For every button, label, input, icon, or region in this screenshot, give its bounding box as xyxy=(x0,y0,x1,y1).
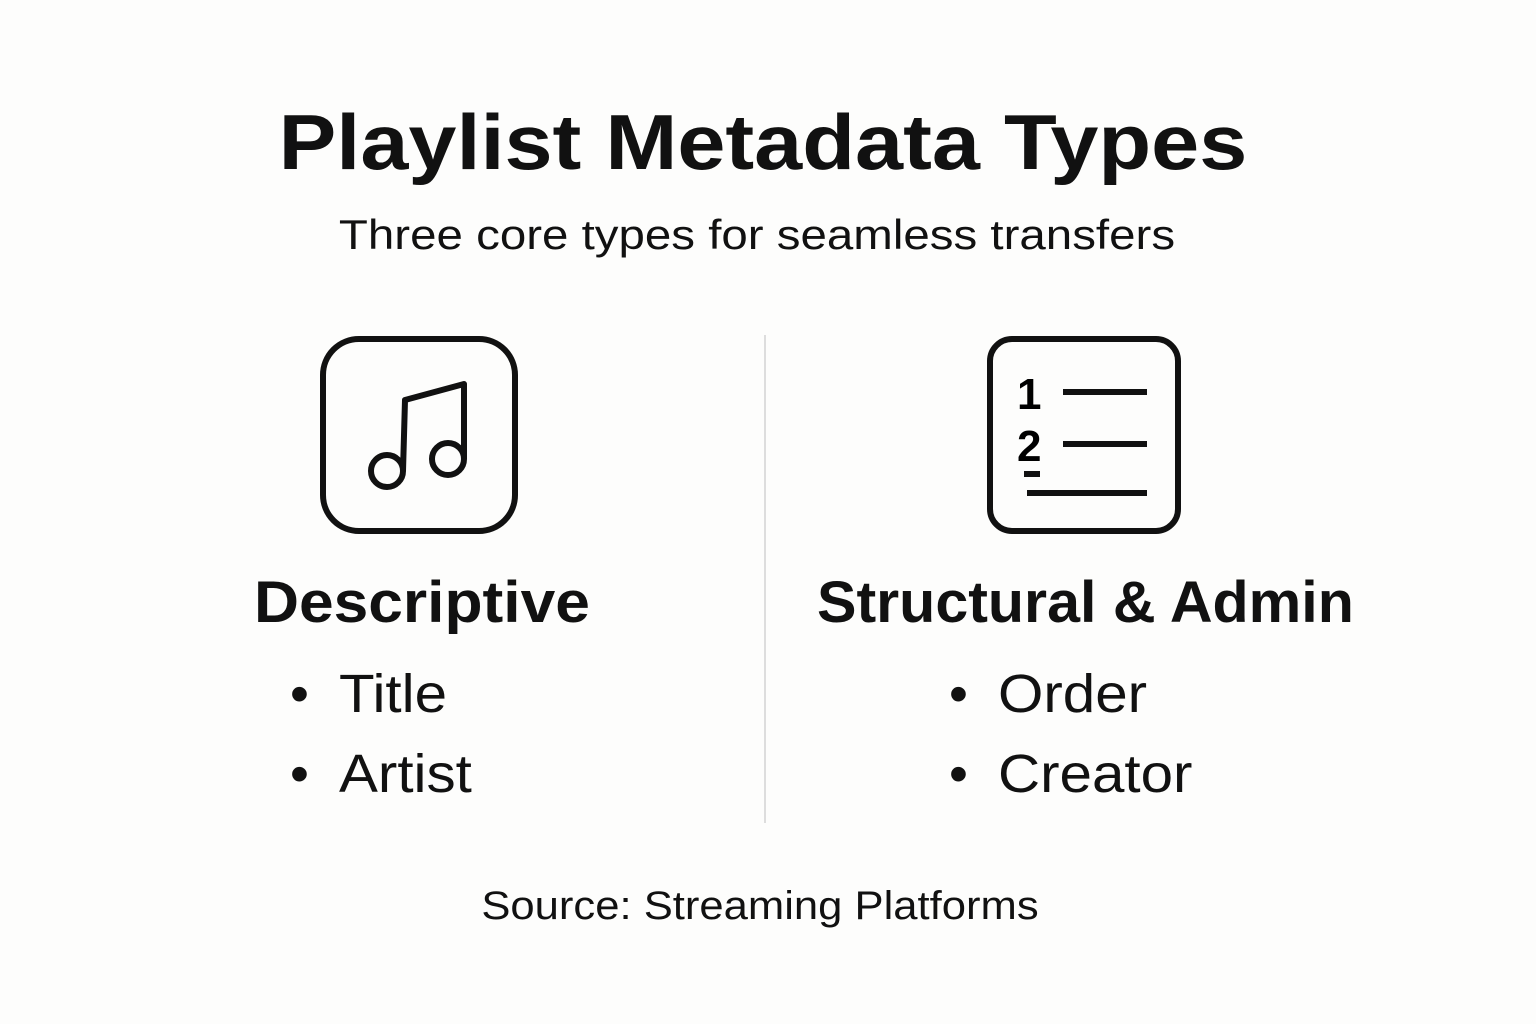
panel: descriptive xyxy=(254,336,590,804)
list xyxy=(949,664,1192,804)
list: Creator xyxy=(998,744,1192,804)
title: Playlist Metadata Types xyxy=(279,98,1247,186)
heading: Descriptive: Descriptive xyxy=(254,570,590,635)
icon: numbered list: 1 xyxy=(1017,370,1041,419)
list: • xyxy=(949,744,968,804)
heading: Structural & Admin: Structural & Admin xyxy=(817,570,1354,635)
subtitle: Three core types for seamless transfers xyxy=(339,211,1175,258)
icon: music note xyxy=(320,336,518,534)
divider xyxy=(764,335,766,823)
source: Source: Streaming Platforms xyxy=(481,884,1039,928)
icon: numbered list xyxy=(987,336,1181,534)
list: • xyxy=(290,664,309,724)
list: Order xyxy=(998,664,1147,724)
panel: structural & admin xyxy=(817,336,1354,804)
list: • xyxy=(949,664,968,724)
list xyxy=(290,664,472,804)
list: Title xyxy=(339,664,447,724)
list: • xyxy=(290,744,309,804)
list: Artist xyxy=(339,744,472,804)
icon: numbered list: 2 xyxy=(1017,422,1041,471)
